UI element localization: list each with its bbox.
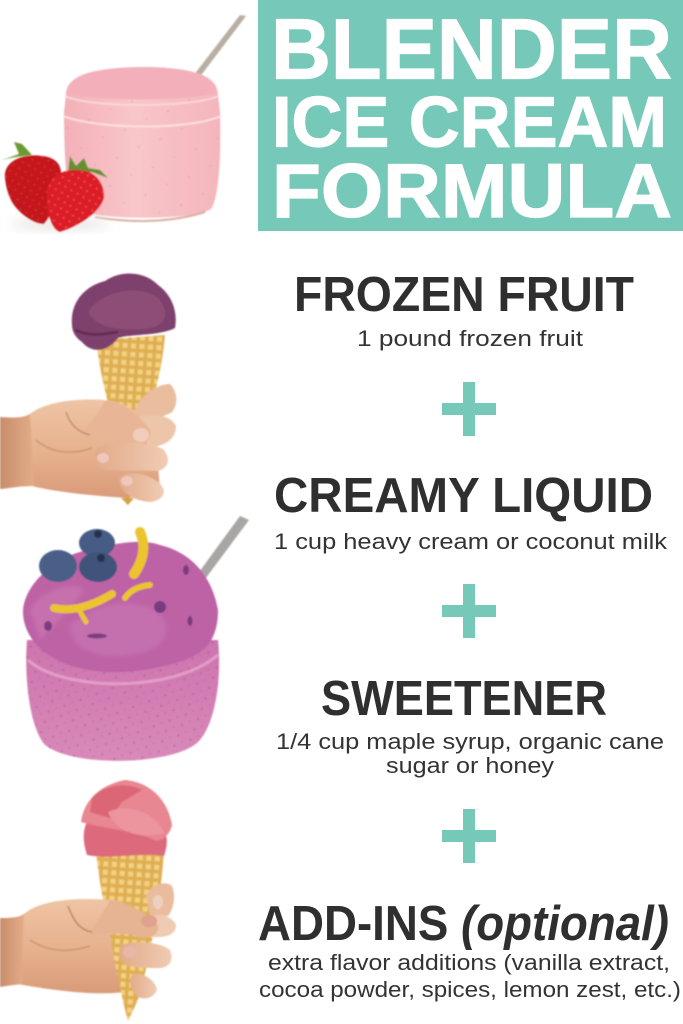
scoop lower: [84, 814, 167, 857]
title banner: FORMULA: [272, 149, 672, 234]
scoop: [72, 273, 176, 350]
strawberry 2 leaves: [68, 156, 108, 178]
blueberry 1: [39, 550, 77, 582]
thumb crease: [66, 412, 90, 435]
section: add-ins: ADD-INS (optional): [258, 897, 669, 951]
strawberry 2: [47, 170, 104, 232]
ice cream surface: [68, 67, 216, 100]
palm crease: [30, 940, 90, 950]
spoon: [186, 516, 249, 594]
swirl highlight: [70, 604, 166, 656]
title banner: [258, 0, 683, 234]
scoop shadow crease: [75, 330, 118, 334]
hand palm: [0, 400, 160, 498]
photo: blueberry ice cream jar with lemon zest: [23, 516, 249, 764]
finger 2: [150, 915, 176, 937]
icon: plus 3: [442, 809, 496, 863]
icon: plus 1: [442, 382, 496, 436]
lower cone over palm: [110, 930, 148, 1021]
cone tip: [121, 498, 134, 505]
strawberry 1 leaves: [1, 142, 32, 160]
jar speckle: [67, 100, 218, 214]
swirl top: [23, 542, 218, 672]
blueberry 2: [79, 529, 115, 557]
strawberry 1: [5, 155, 61, 224]
swirl dark spots: [44, 565, 192, 638]
body speckle: [24, 640, 220, 764]
finger 3: [119, 942, 172, 968]
section: creamy liquid: [274, 469, 668, 554]
finger 4: [130, 974, 157, 998]
photo: strawberry ice cream jar: [1, 15, 246, 232]
jar rim: [28, 655, 218, 684]
finger 2: [140, 415, 176, 447]
finger 3: [94, 443, 168, 471]
thumb crease: [68, 906, 92, 932]
jar rim 2: [63, 116, 221, 126]
thumb: [85, 900, 158, 938]
strawberry 2 seeds: [47, 170, 104, 232]
title banner: ICE CREAM: [272, 84, 667, 162]
finger 4: [118, 473, 164, 502]
blueberry 3: [79, 552, 117, 582]
section: sweetener: SWEETENER: [321, 672, 607, 726]
arm: [0, 914, 24, 987]
cone: [96, 850, 164, 1021]
strawberry shadow: [10, 218, 110, 230]
section: frozen fruit: 1 pound frozen fruit: [357, 326, 583, 351]
hand palm: [0, 899, 155, 993]
section: sweetener: sugar or honey: [386, 753, 554, 778]
finger 1: [146, 883, 174, 916]
scoop highlight: [108, 809, 164, 835]
section: creamy liquid: CREAMY LIQUID: [274, 469, 653, 523]
title banner: BLENDER: [271, 2, 672, 98]
icon: plus 2: [442, 584, 496, 638]
section: frozen fruit: [294, 268, 634, 351]
section: add-ins: extra flavor additions (vanilla extract,: [268, 950, 670, 975]
jar rim 1: [65, 96, 219, 105]
finger 1: [135, 384, 176, 419]
swirl highlight 2: [30, 586, 85, 640]
jar: [64, 67, 220, 218]
scoop flakes: [90, 785, 142, 818]
section: sweetener: [276, 672, 664, 778]
lemon zest: [54, 532, 150, 622]
cone: [96, 335, 165, 505]
section: sweetener: 1/4 cup maple syrup, organic cane: [276, 729, 664, 754]
spoon: [190, 15, 246, 82]
section: add-ins: [258, 897, 681, 1002]
blueberry crowns: [94, 530, 105, 562]
thumb: [78, 401, 150, 445]
jar body: [26, 640, 219, 761]
strawberry 1 seeds: [5, 156, 58, 221]
scoop highlight: [88, 291, 165, 330]
palm crease: [36, 440, 92, 452]
section: frozen fruit: FROZEN FRUIT: [294, 268, 634, 322]
section: creamy liquid: 1 cup heavy cream or coconut milk: [274, 529, 668, 554]
jar base: [95, 212, 205, 221]
section: add-ins: cocoa powder, spices, lemon zest, etc.): [259, 977, 681, 1002]
scoop upper: [81, 780, 172, 840]
arm: [0, 414, 34, 489]
photo: blueberry ice cream cone in hand: [0, 273, 176, 505]
photo: strawberry ice cream cone in hand: [0, 780, 176, 1021]
